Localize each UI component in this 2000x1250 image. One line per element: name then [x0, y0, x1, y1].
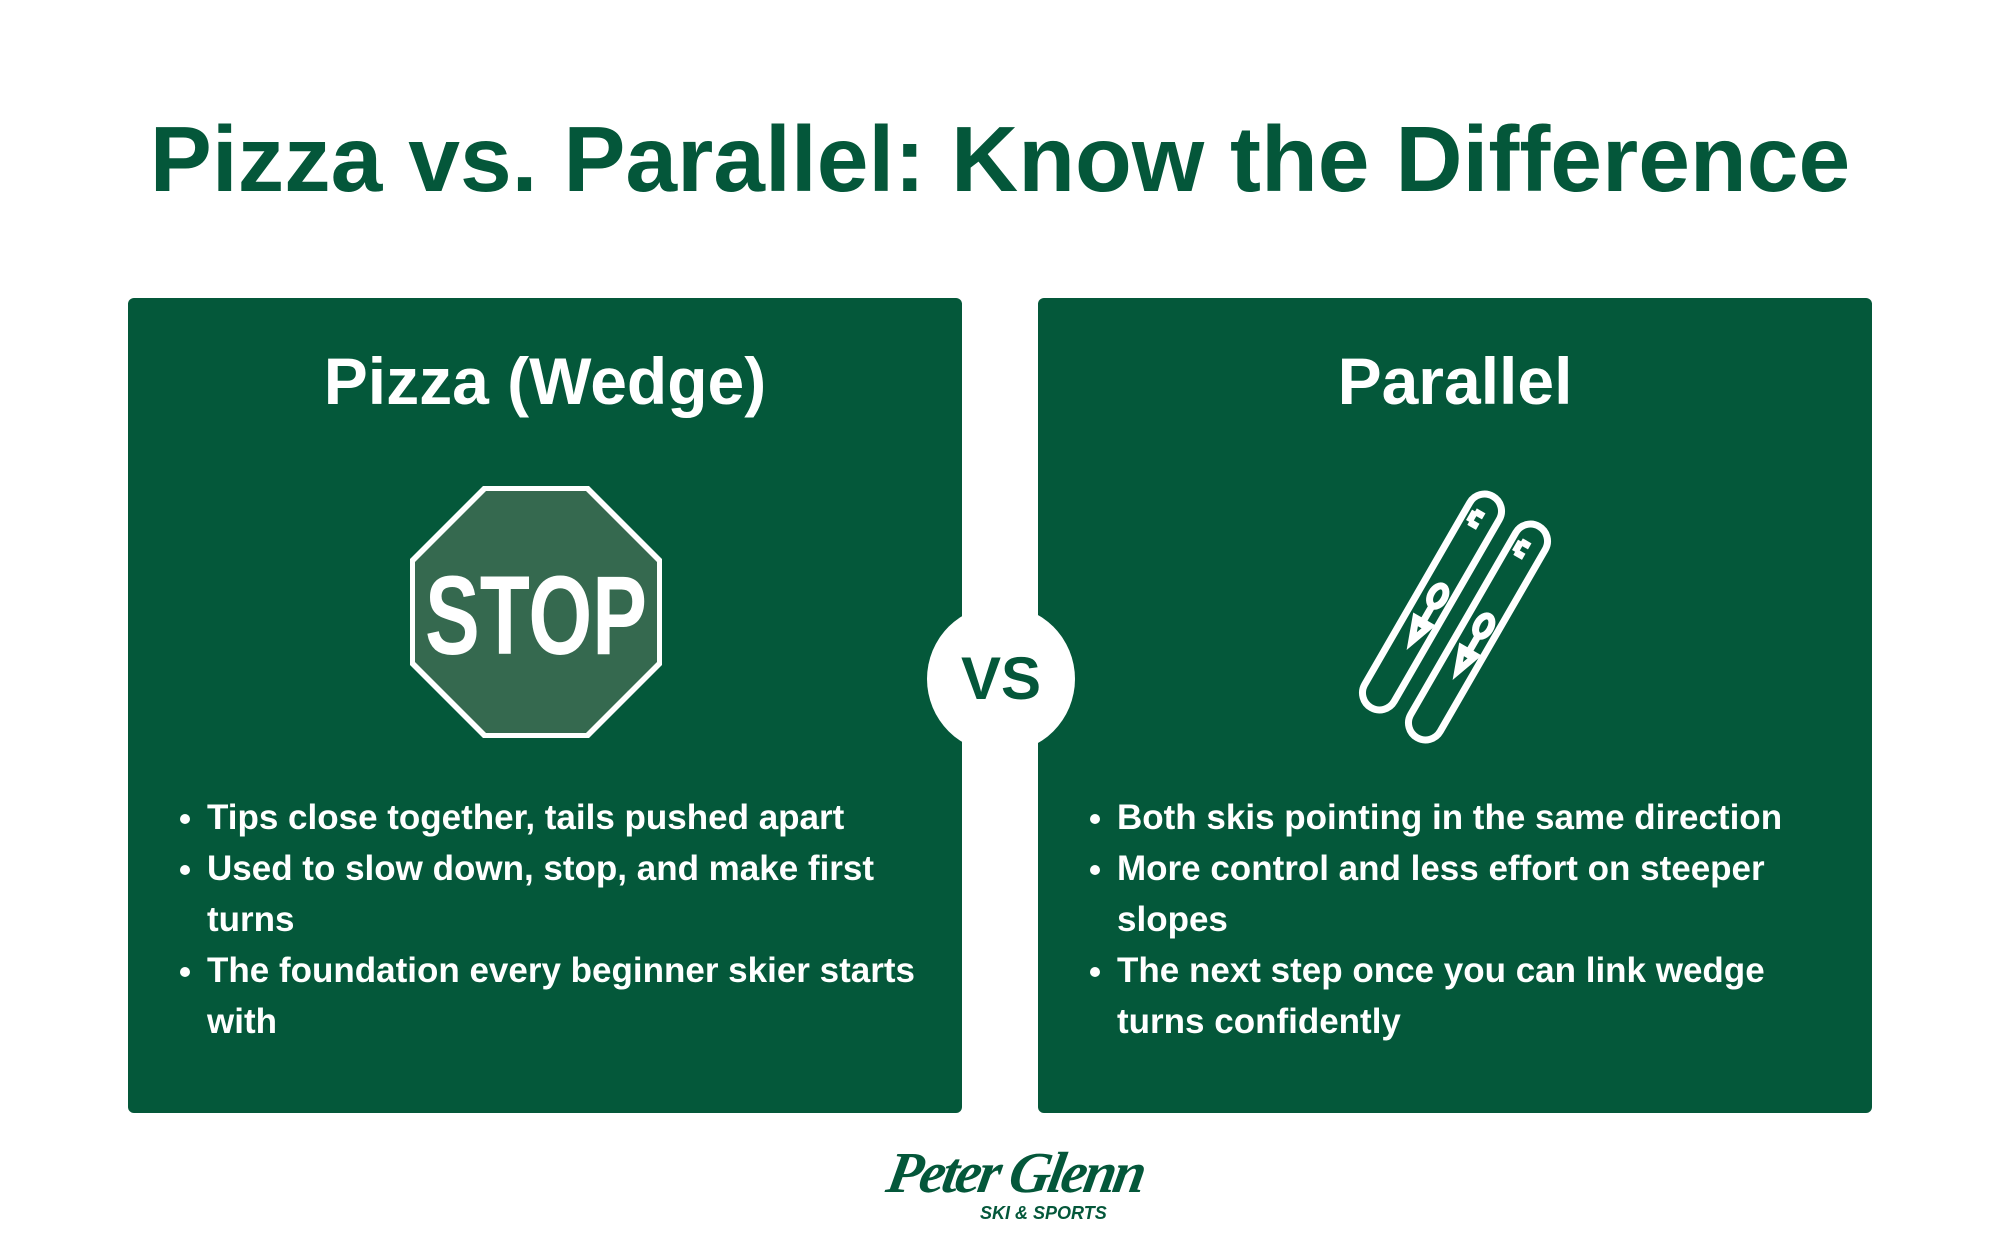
bullets: pizza — [180, 798, 915, 1041]
bullets: pizza: Tips close together, tails pushed apart — [207, 798, 844, 837]
vs badge: VS — [961, 645, 1041, 712]
bullets: parallel: The next step once you can link wedge turns confidently — [1117, 951, 1765, 1041]
vs badge — [927, 605, 1075, 753]
bullets: pizza: Used to slow down, stop, and make first turns — [207, 849, 874, 939]
bullets: parallel: More control and less effort on steeper slopes — [1117, 849, 1765, 939]
panel: pizza — [128, 298, 962, 1113]
icon: skis — [1358, 490, 1552, 744]
icon: stop sign — [410, 486, 662, 738]
logo: SKI & SPORTS — [980, 1203, 1107, 1223]
bullets: pizza: The foundation every beginner skier starts with — [207, 951, 915, 1041]
panel: parallel — [1038, 298, 1872, 1113]
heading: pizza: Pizza (Wedge) — [324, 344, 766, 418]
bullets: parallel — [1090, 798, 1782, 1041]
heading: parallel: Parallel — [1338, 344, 1572, 418]
title: Pizza vs. Parallel: Know the Difference — [150, 107, 1850, 211]
bullets: parallel: Both skis pointing in the same direction — [1117, 798, 1782, 837]
logo: Peter Glenn — [882, 1140, 1149, 1205]
